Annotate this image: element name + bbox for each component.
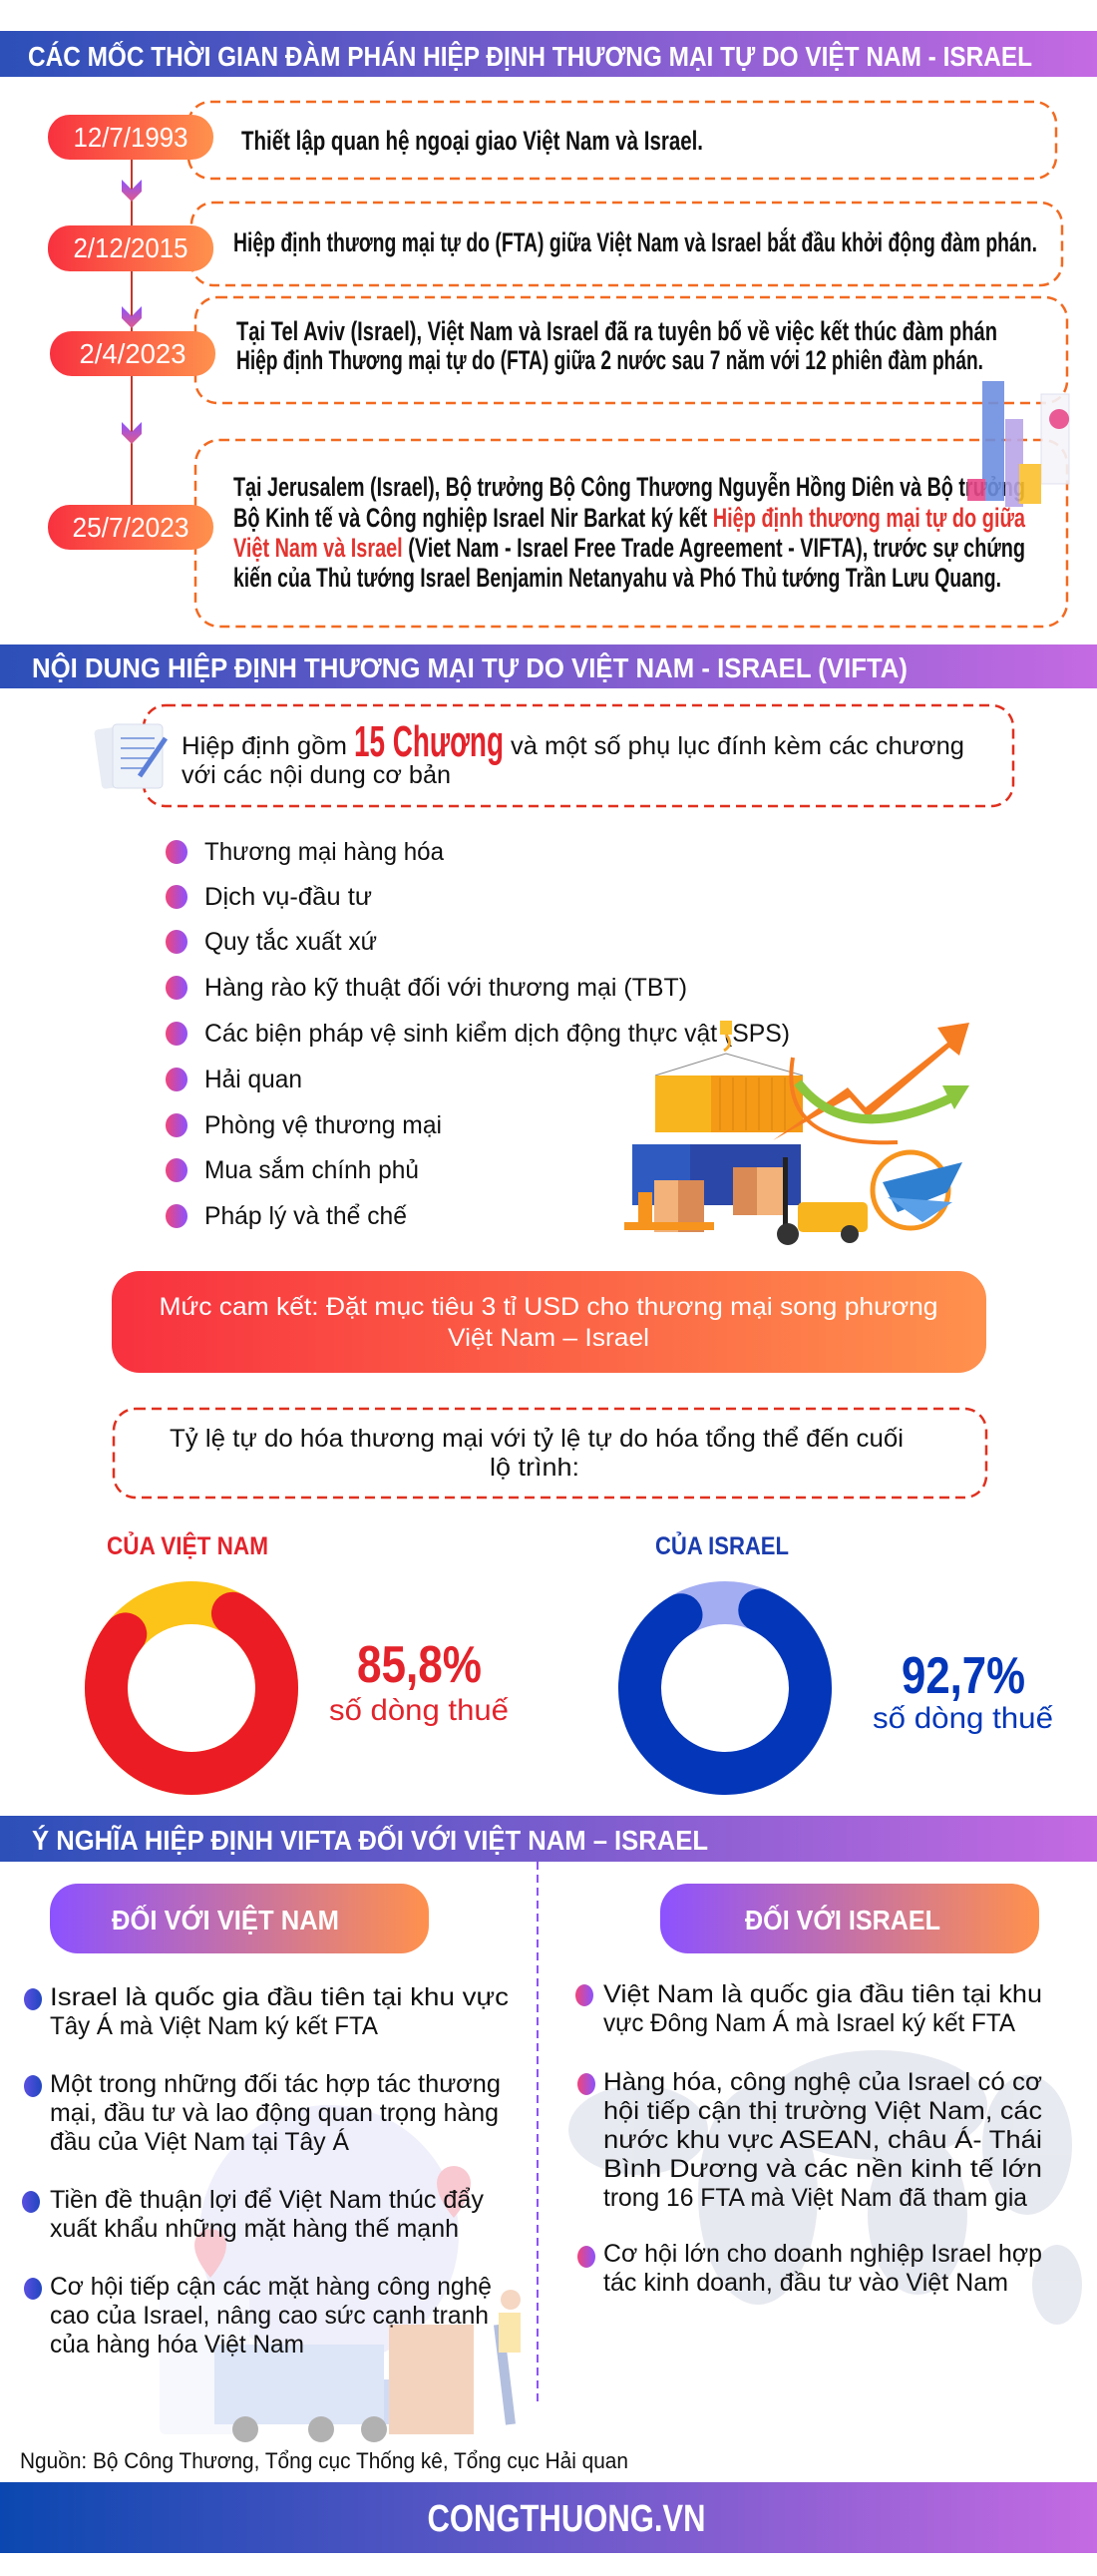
list: agreement chapters <box>166 838 790 1230</box>
chart: Vietnam donut: số dòng thuế <box>329 1694 509 1727</box>
list: agreement chapters: Phòng vệ thương mại <box>204 1111 442 1139</box>
timeline connector line <box>122 160 142 505</box>
chart: Vietnam donut: 85,8% <box>357 1636 482 1694</box>
illustration: logistics containers <box>624 1021 969 1245</box>
list: significance for Vietnam: Cơ hội tiếp cận các mặt hàng công nghệ <box>50 2273 492 2301</box>
callout: liberalization rate: lộ trình: <box>490 1454 579 1482</box>
footer <box>0 2482 1097 2553</box>
callout: 15 chapters: Hiệp định gồm <box>182 732 347 760</box>
list: significance for Israel: vực Đông Nam Á mà Israel ký kết FTA <box>603 2008 1015 2037</box>
list: significance for Vietnam: cao của Israel, nâng cao sức cạnh tranh <box>50 2302 489 2330</box>
section 3 title bar <box>0 1816 1097 1862</box>
section 2 title bar <box>0 644 1097 688</box>
callout: 15 chapters: với các nội dung cơ bản <box>182 761 451 789</box>
callout: commitment <box>112 1271 986 1373</box>
pill: for Israel <box>660 1884 1039 1953</box>
callout: 15 chapters <box>94 705 1013 806</box>
callout: commitment: Mức cam kết: Đặt mục tiêu 3 tỉ USD cho thương mại song phương <box>160 1293 937 1321</box>
callout: 15 chapters: và một số phụ lục đính kèm các chương <box>511 732 964 760</box>
list: agreement chapters: Mua sắm chính phủ <box>204 1155 419 1184</box>
section 2 title bar: NỘI DUNG HIỆP ĐỊNH THƯƠNG MẠI TỰ DO VIỆT NAM - ISRAEL (VIFTA) <box>32 651 908 683</box>
source note: Nguồn: Bộ Công Thương, Tổng cục Thống kê, Tổng cục Hải quan <box>20 2448 628 2473</box>
list: significance for Israel <box>575 1980 1042 2297</box>
pill: for Vietnam: ĐỐI VỚI VIỆT NAM <box>112 1904 339 1935</box>
list: significance for Vietnam <box>22 1983 509 2359</box>
list: significance for Israel: Việt Nam là quốc gia đầu tiên tại khu <box>603 1980 1042 2008</box>
timeline item 3: 2/4/2023 <box>80 338 185 369</box>
callout: commitment: Việt Nam – Israel <box>448 1324 649 1352</box>
list: significance for Israel: trong 16 FTA mà Việt Nam đã tham gia <box>603 2184 1027 2212</box>
timeline item 3 <box>50 297 1067 403</box>
list: significance for Israel: Hàng hóa, công nghệ của Israel có cơ <box>603 2068 1042 2096</box>
pill: for Vietnam <box>50 1884 429 1953</box>
list: agreement chapters: Pháp lý và thể chế <box>204 1202 407 1230</box>
chart: Israel donut <box>612 1530 1053 1801</box>
callout: liberalization rate <box>114 1409 986 1498</box>
list: significance for Vietnam: mại, đầu tư và lao động quan trọng hàng <box>50 2099 499 2127</box>
chart: Israel donut: 92,7% <box>902 1647 1025 1705</box>
list: significance for Vietnam: Tây Á mà Việt Nam ký kết FTA <box>50 2011 378 2040</box>
list: significance for Israel: tác kinh doanh, đầu tư vào Việt Nam <box>603 2269 1008 2297</box>
timeline item 4 <box>48 440 1067 627</box>
timeline item 1 <box>48 102 1056 179</box>
list: significance for Israel: nước khu vực ASEAN, châu Á- Thái <box>603 2125 1042 2154</box>
chart: Israel donut: CỦA ISRAEL <box>655 1530 789 1560</box>
chart: Vietnam donut <box>76 1530 509 1804</box>
section 1 title bar <box>0 31 1097 77</box>
icon: document <box>94 723 166 789</box>
list: significance for Vietnam: Tiền đề thuận lợi để Việt Nam thúc đẩy <box>50 2186 485 2214</box>
timeline item 4: 25/7/2023 <box>72 512 189 543</box>
list: agreement chapters: Các biện pháp vệ sinh kiểm dịch động thực vật (SPS) <box>204 1020 790 1048</box>
callout: 15 chapters: 15 Chương <box>354 717 504 766</box>
illustration: globe and truck background <box>160 2105 521 2442</box>
section 3 title bar: Ý NGHĨA HIỆP ĐỊNH VIFTA ĐỐI VỚI VIỆT NAM – ISRAEL <box>32 1824 708 1856</box>
footer: CONGTHUONG.VN <box>427 2498 706 2540</box>
list: agreement chapters: Hải quan <box>204 1066 302 1093</box>
icon: bar chart decoration <box>967 381 1069 507</box>
list: significance for Israel: Bình Dương và các nền kinh tế lớn <box>603 2155 1042 2183</box>
list: agreement chapters: Hàng rào kỹ thuật đối với thương mại (TBT) <box>204 974 687 1002</box>
timeline item 1: 12/7/1993 <box>74 122 187 153</box>
list: significance for Vietnam: của hàng hóa Việt Nam <box>50 2331 304 2359</box>
chart: Israel donut: số dòng thuế <box>873 1702 1053 1735</box>
illustration: world map background <box>568 2050 1082 2325</box>
list: agreement chapters: Dịch vụ-đầu tư <box>204 883 372 911</box>
timeline item 1: Thiết lập quan hệ ngoại giao Việt Nam và Israel. <box>241 126 703 156</box>
list: significance for Vietnam: Một trong những đối tác hợp tác thương <box>50 2070 501 2098</box>
timeline item 2 <box>48 203 1062 285</box>
list: significance for Vietnam: đầu của Việt Nam tại Tây Á <box>50 2127 349 2156</box>
chart: Vietnam donut: CỦA VIỆT NAM <box>107 1530 268 1560</box>
timeline item 2: 2/12/2015 <box>74 232 187 263</box>
list: significance for Vietnam: xuất khẩu những mặt hàng thế mạnh <box>50 2215 459 2243</box>
list: agreement chapters: Quy tắc xuất xứ <box>204 927 377 956</box>
list: significance for Vietnam: Israel là quốc gia đầu tiên tại khu vực <box>50 1983 509 2011</box>
list: significance for Israel: Cơ hội lớn cho doanh nghiệp Israel hợp <box>603 2240 1042 2268</box>
pill: for Israel: ĐỐI VỚI ISRAEL <box>745 1904 940 1935</box>
list: agreement chapters: Thương mại hàng hóa <box>204 838 444 866</box>
list: significance for Israel: hội tiếp cận thị trường Việt Nam, các <box>603 2097 1042 2125</box>
callout: liberalization rate: Tỷ lệ tự do hóa thương mại với tỷ lệ tự do hóa tổng thể đến cuối <box>170 1425 904 1453</box>
